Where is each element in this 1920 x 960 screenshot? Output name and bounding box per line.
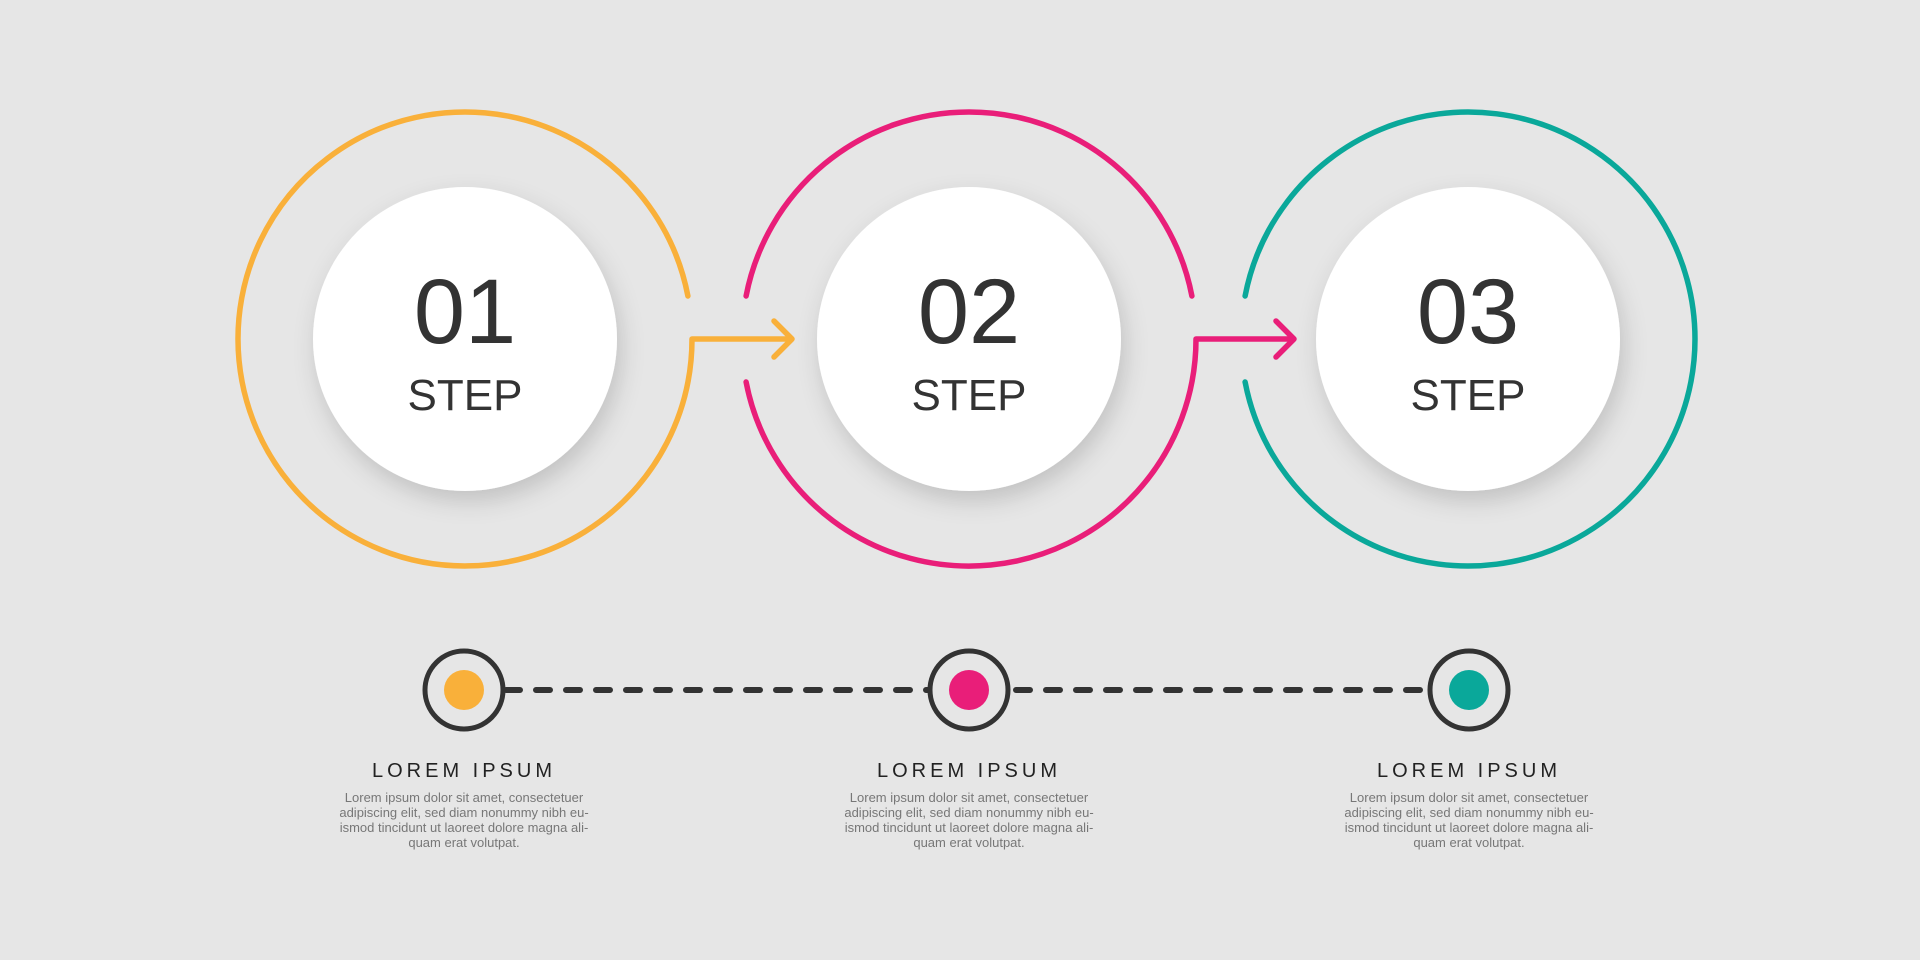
text block 2 [844,760,1094,850]
step 1 badge: STEP [408,371,522,420]
text block 1: quam erat volutpat. [408,835,520,850]
text block 3: Lorem ipsum dolor sit amet, consectetuer [1350,790,1589,805]
text block 2: adipiscing elit, sed diam nonummy nibh eu- [844,805,1094,820]
step 2 ring with arrow [746,112,1294,566]
timeline marker 1 [425,651,503,729]
timeline marker 2 [930,651,1008,729]
step 1 badge: 01 [414,261,516,363]
text block 2: Lorem ipsum dolor sit amet, consectetuer [850,790,1089,805]
step 2 badge [817,187,1121,491]
timeline marker 3 [1430,651,1508,729]
step 3 badge [1316,187,1620,491]
text block 1: adipiscing elit, sed diam nonummy nibh eu- [339,805,589,820]
text block 2: LOREM IPSUM [877,760,1061,782]
step 2 badge: STEP [912,371,1026,420]
step 2 badge: 02 [918,261,1020,363]
text block 1: LOREM IPSUM [372,760,556,782]
text block 1: Lorem ipsum dolor sit amet, consectetuer [345,790,584,805]
text block 3: LOREM IPSUM [1377,760,1561,782]
text block 3: adipiscing elit, sed diam nonummy nibh eu- [1344,805,1594,820]
step 3 badge: STEP [1411,371,1525,420]
text block 3: ismod tincidunt ut laoreet dolore magna ali- [1345,820,1593,835]
step 1 badge [313,187,617,491]
text block 1 [339,760,589,850]
text block 2: quam erat volutpat. [913,835,1025,850]
step 3 ring [1245,112,1695,566]
text block 3 [1344,760,1594,850]
text block 1: ismod tincidunt ut laoreet dolore magna ali- [340,820,588,835]
step 1 ring with arrow [238,112,792,566]
step 3 badge: 03 [1417,261,1519,363]
text block 3: quam erat volutpat. [1413,835,1525,850]
dashed timeline [506,687,1428,693]
text block 2: ismod tincidunt ut laoreet dolore magna ali- [845,820,1093,835]
